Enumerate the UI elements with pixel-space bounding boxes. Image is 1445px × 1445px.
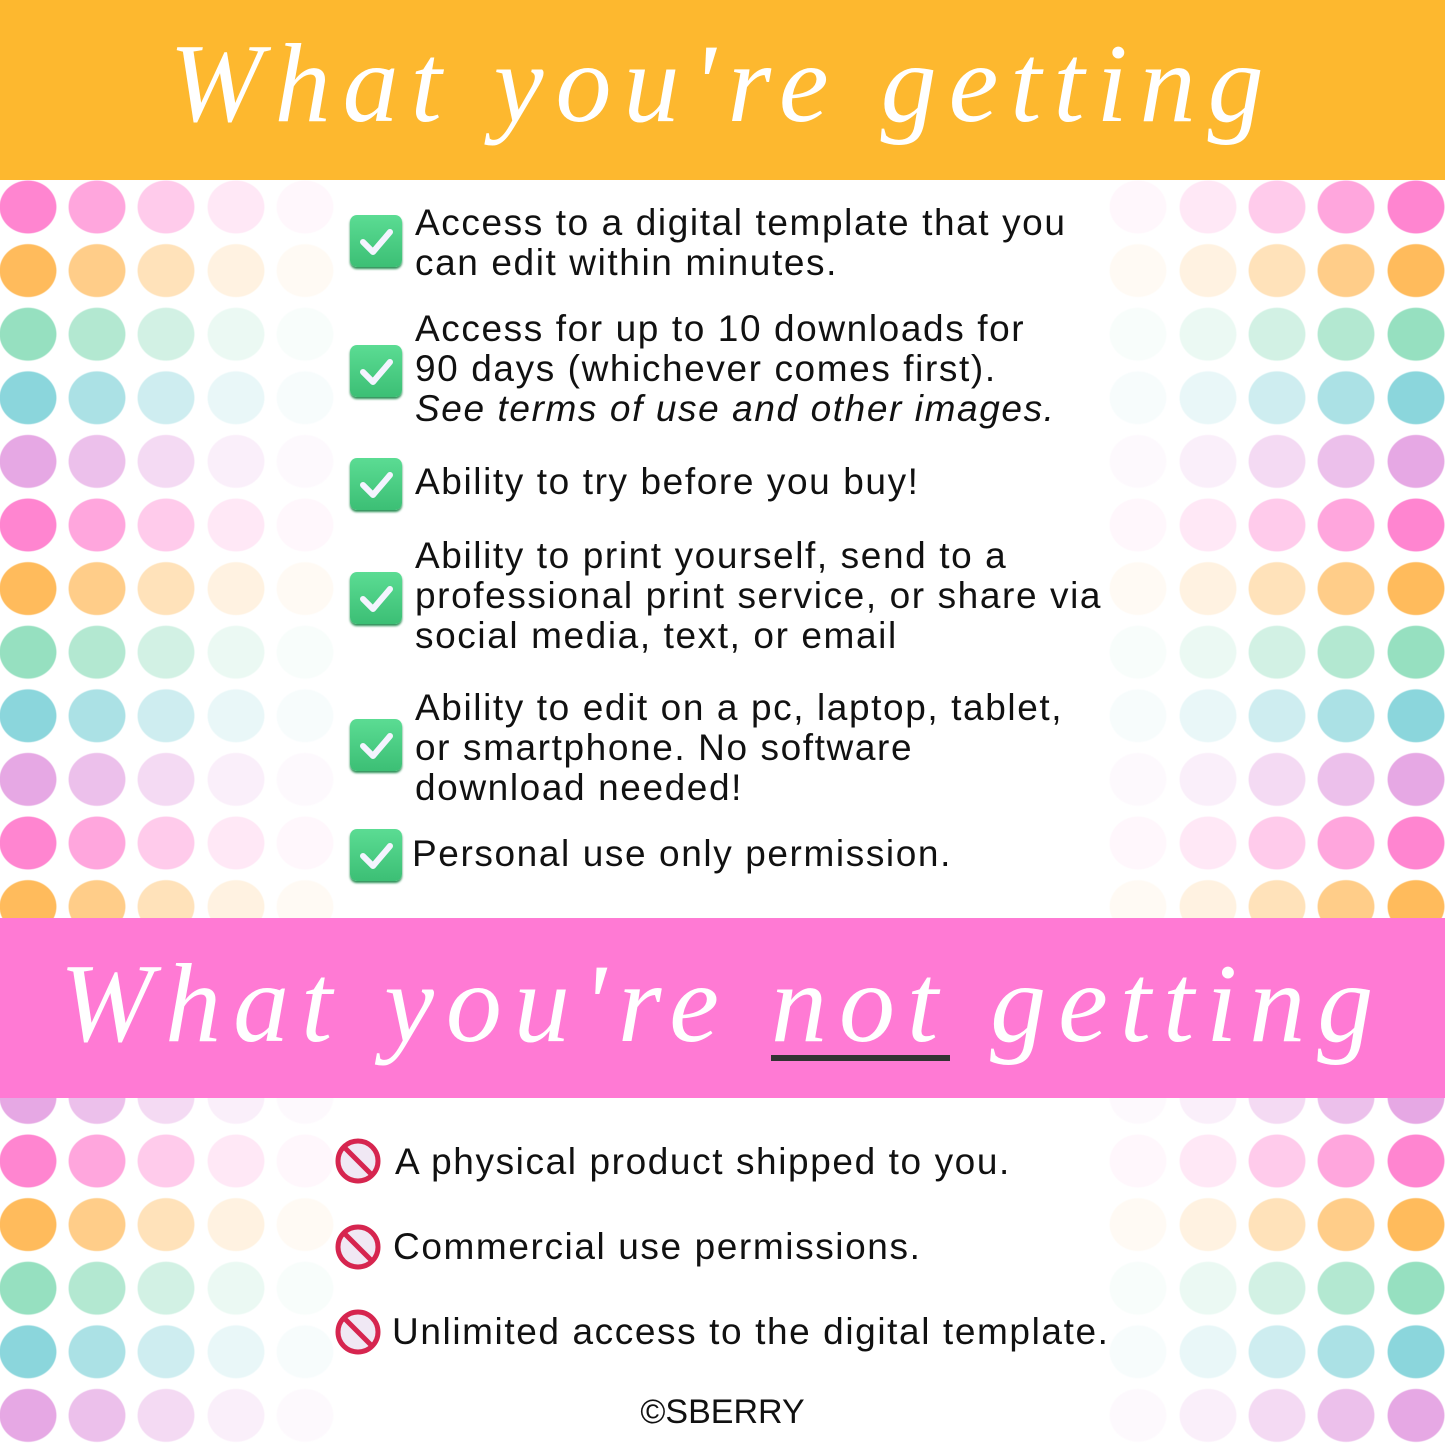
banner: what you're getting: [0, 0, 1445, 180]
item 5: [348, 687, 1063, 808]
not item 2: [336, 1224, 921, 1270]
text: social media, text, or email: [415, 615, 898, 656]
text: 90 days (whichever comes first).: [415, 348, 997, 389]
text: professional print service, or share via: [415, 575, 1102, 616]
item 2: [348, 308, 1056, 429]
title getting: What you're getting: [169, 22, 1276, 146]
text: Ability to print yourself, send to a: [415, 535, 1007, 576]
text: Unlimited access to the digital template.: [392, 1311, 1110, 1352]
text: Ability to try before you buy!: [415, 461, 920, 502]
title not getting: What you're getting: [60, 942, 1385, 1066]
text: or smartphone. No software: [415, 727, 913, 768]
banner: what you're not getting: [0, 918, 1445, 1098]
text: Personal use only permission.: [412, 833, 952, 874]
item 1: [348, 202, 1067, 283]
title not getting: not: [771, 942, 950, 1066]
not item 1: [336, 1138, 1011, 1184]
item 3: [348, 458, 920, 514]
copyright: ©SBERRY: [640, 1393, 805, 1431]
text: Ability to edit on a pc, laptop, tablet,: [415, 687, 1063, 728]
not item 3: [336, 1310, 1110, 1354]
text: download needed!: [415, 767, 743, 808]
item 4: [348, 535, 1102, 656]
text: can edit within minutes.: [415, 242, 838, 283]
text: See terms of use and other images.: [415, 388, 1056, 429]
text: Access for up to 10 downloads for: [415, 308, 1025, 349]
text: A physical product shipped to you.: [395, 1141, 1011, 1182]
item 6: [348, 829, 952, 885]
text: Access to a digital template that you: [415, 202, 1067, 243]
text: Commercial use permissions.: [393, 1226, 921, 1267]
